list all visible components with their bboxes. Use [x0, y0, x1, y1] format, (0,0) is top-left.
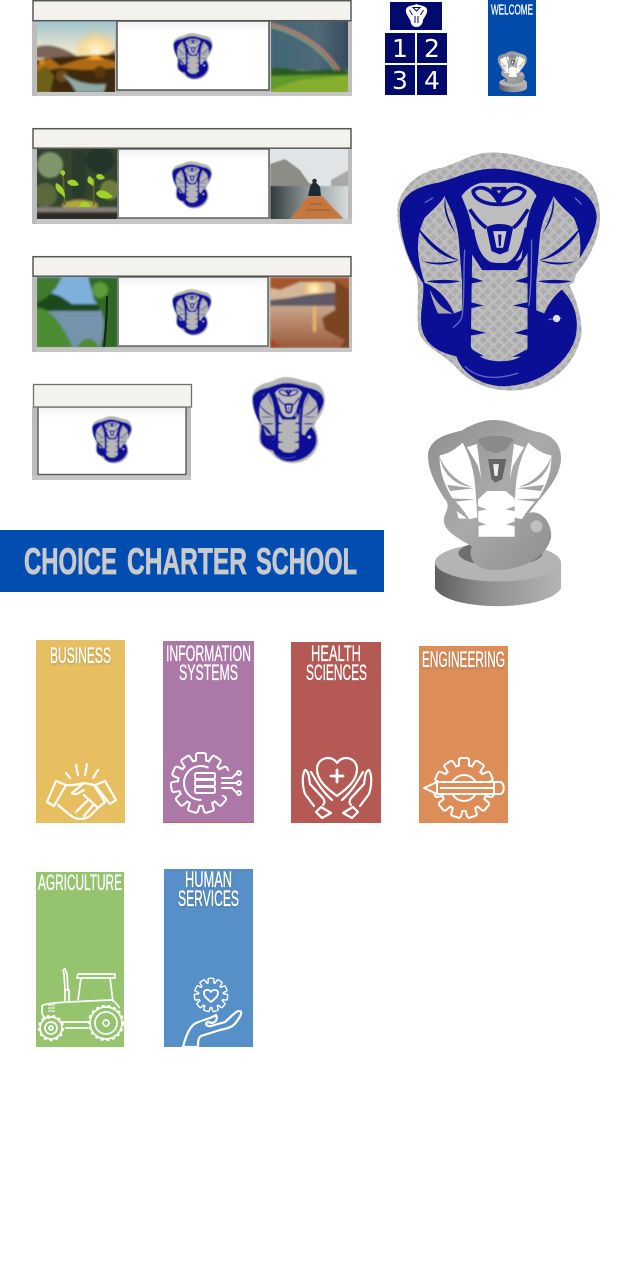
photo: forest sunset — [36, 20, 118, 93]
school name banner — [0, 530, 384, 592]
card: agriculture — [36, 870, 124, 1047]
banner 4: small logo box — [32, 384, 192, 480]
photo: rainbow over field — [270, 20, 350, 93]
large cobra emblem — [397, 153, 600, 391]
photo: green lake — [36, 276, 118, 348]
card: information systems: SYSTEMS — [179, 660, 238, 685]
navigation: logo tile — [390, 2, 442, 30]
infographic canvas — [0, 0, 600, 1047]
icon: gear and pencil — [424, 759, 504, 817]
banner 3: green lake, logo, autumn lake — [32, 257, 352, 352]
logo panel — [118, 149, 269, 218]
card: information systems — [163, 641, 254, 823]
school name banner: SCHOOL — [256, 541, 357, 582]
cobra statue on base — [428, 420, 561, 606]
card: engineering: ENGINEERING — [422, 647, 505, 672]
card: health sciences: SCIENCES — [306, 660, 367, 685]
title bar — [33, 129, 351, 148]
school name banner: CHARTER — [127, 541, 247, 582]
icon: tractor — [38, 969, 124, 1040]
title bar — [33, 1, 351, 21]
welcome tile — [488, 0, 536, 96]
card: health sciences — [291, 641, 381, 823]
banner 1: sunset, logo, rainbow — [32, 1, 352, 96]
navigation: numbered tiles: 2 — [424, 34, 440, 63]
card: human services: HUMAN — [185, 867, 232, 892]
card: information systems: INFORMATION — [166, 641, 251, 666]
title bar — [33, 257, 351, 276]
navigation: numbered tiles: 1 — [392, 34, 408, 63]
card: engineering — [419, 646, 508, 823]
navigation: numbered tiles: 4 — [424, 66, 440, 95]
card: human services: SERVICES — [178, 886, 239, 911]
school name banner: CHOICE — [24, 541, 117, 582]
card: business — [36, 640, 125, 823]
banner 2: seedling, logo, lake person — [32, 129, 352, 224]
photo: person on pier — [269, 148, 350, 220]
title bar — [34, 384, 192, 407]
small cobra logo — [92, 416, 132, 463]
icon: hands holding heart — [303, 758, 371, 818]
welcome tile: WELCOME — [491, 2, 533, 18]
navigation: numbered tiles: 3 — [392, 66, 408, 95]
navigation: numbered tiles — [385, 33, 447, 95]
card: business: BUSINESS — [50, 643, 111, 668]
photo: seedlings — [37, 149, 117, 219]
icon: gear with server — [172, 754, 241, 812]
icon: handshake — [47, 764, 116, 819]
standalone cobra logo — [252, 377, 325, 463]
logo panel — [118, 277, 268, 346]
card: health sciences: HEALTH — [311, 641, 361, 666]
photo: autumn lake sunset — [269, 276, 351, 348]
card: agriculture: AGRICULTURE — [38, 870, 122, 895]
icon: hand holding gear with heart — [183, 979, 241, 1047]
logo panel — [117, 21, 269, 90]
card: human services — [164, 867, 253, 1047]
